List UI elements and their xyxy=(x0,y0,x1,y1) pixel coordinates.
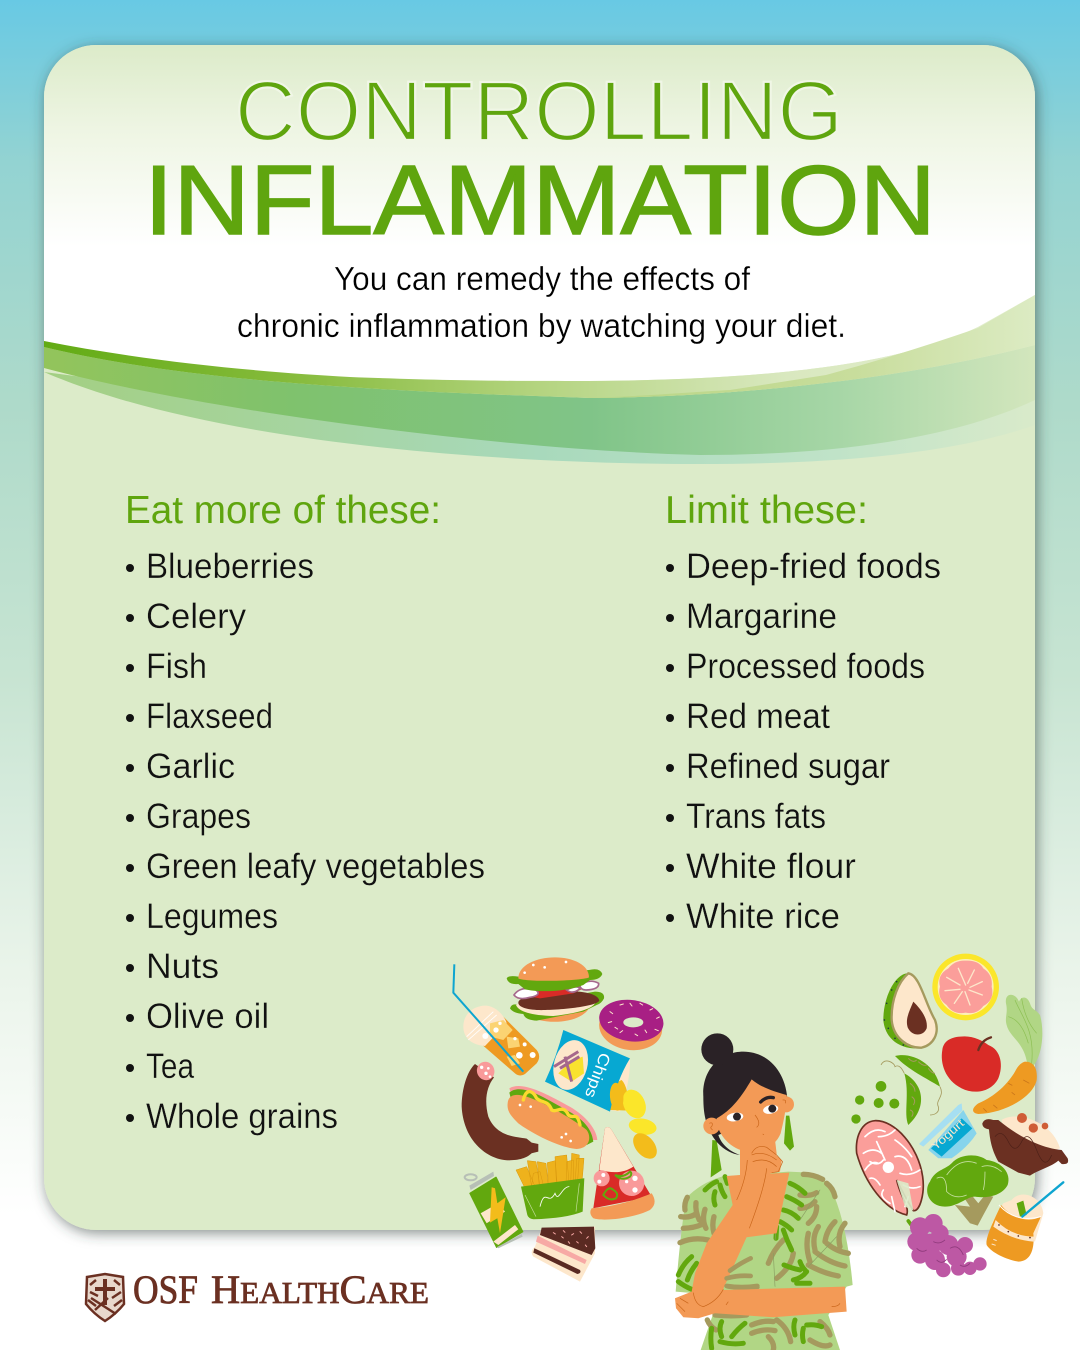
icon: avocado xyxy=(883,973,937,1049)
list: foods to eat: Celery xyxy=(146,597,246,636)
icon: burger xyxy=(507,957,604,1022)
list: foods to eat: Green leafy vegetables xyxy=(146,847,485,886)
icon: energy drink can xyxy=(465,1172,523,1248)
icon: juice jar xyxy=(986,1182,1063,1262)
list: foods to limit: Trans fats xyxy=(686,797,826,836)
hand at chin xyxy=(737,1146,783,1228)
list: foods to eat: Nuts xyxy=(146,947,219,986)
icon: pizza xyxy=(590,1127,655,1220)
chips label: Chips xyxy=(581,1050,613,1100)
list: foods to eat: Flaxseed xyxy=(146,697,273,736)
title: Inflammation: INFLAMMATION xyxy=(144,145,936,255)
icon: grapes xyxy=(907,1214,987,1277)
icon: carrot xyxy=(973,995,1042,1114)
list: foods to eat: Grapes xyxy=(146,797,251,836)
list: foods to limit: Red meat xyxy=(686,697,830,736)
illustration: thinking woman xyxy=(675,1033,853,1350)
icon: grapefruit xyxy=(932,954,999,1020)
intro text: chronic inflammation by watching your diet. xyxy=(237,307,846,344)
illustration: healthy foods xyxy=(851,954,1068,1277)
icon: yogurt cup xyxy=(919,1103,977,1158)
logo wordmark second part: HEALTHCARE xyxy=(211,1267,429,1312)
icon: salmon steak xyxy=(856,1121,923,1215)
list: foods to eat: Blueberries xyxy=(146,547,314,586)
icon: donut xyxy=(596,996,666,1054)
panel: limit list xyxy=(665,489,941,936)
heading: limit: Limit these: xyxy=(665,489,868,532)
icon: loose chips xyxy=(609,1082,662,1163)
list: foods to limit: White rice xyxy=(686,897,840,936)
ears xyxy=(703,1096,794,1134)
intro text: You can remedy the effects of xyxy=(334,260,751,297)
icon: hot dog xyxy=(508,1086,597,1149)
icon: grain bowl xyxy=(982,1113,1068,1176)
neck xyxy=(740,1140,777,1177)
illustration: unhealthy foods xyxy=(453,957,666,1282)
hair xyxy=(703,1052,787,1155)
logo: OSF HealthCare xyxy=(86,1267,429,1321)
list: foods to limit: Processed foods xyxy=(686,647,925,686)
icon: pea pods xyxy=(851,1055,941,1125)
title: Controlling: CONTROLLING xyxy=(235,64,843,158)
heading: eat more: Eat more of these: xyxy=(125,489,441,532)
icon: sausage xyxy=(462,1059,538,1160)
yogurt label: Yogurt xyxy=(930,1117,968,1153)
hair bun xyxy=(701,1033,733,1065)
logo wordmark: OSF xyxy=(133,1267,198,1312)
list: foods to limit: Margarine xyxy=(686,597,837,636)
list: foods to eat: Legumes xyxy=(146,897,278,936)
icon: soda cup xyxy=(453,964,539,1076)
list: foods to eat: Olive oil xyxy=(146,997,269,1036)
list: foods to eat: Whole grains xyxy=(146,1097,338,1136)
icon: fries xyxy=(516,1153,584,1219)
dress xyxy=(676,1172,853,1350)
face xyxy=(709,1079,787,1152)
icon: chips bag xyxy=(545,1030,630,1112)
icon: layer cake xyxy=(532,1227,595,1282)
icon: broccoli xyxy=(927,1155,1009,1226)
list: foods to eat xyxy=(126,547,485,1136)
dress leaf pattern xyxy=(678,1174,848,1350)
list: foods to limit: White flour xyxy=(686,847,856,886)
list: foods to limit: Deep-fried foods xyxy=(686,547,941,586)
icon: apple xyxy=(942,1036,1001,1092)
intro text xyxy=(237,260,846,344)
list: foods to limit xyxy=(666,547,941,936)
icon: crest shield xyxy=(86,1274,124,1321)
chest and arm xyxy=(675,1173,847,1318)
list: foods to limit: Refined sugar xyxy=(686,747,890,786)
panel: eat more list xyxy=(125,489,485,1136)
earrings xyxy=(711,1109,794,1177)
list: foods to eat: Tea xyxy=(146,1047,194,1086)
list: foods to eat: Garlic xyxy=(146,747,235,786)
list: foods to eat: Fish xyxy=(146,647,207,686)
